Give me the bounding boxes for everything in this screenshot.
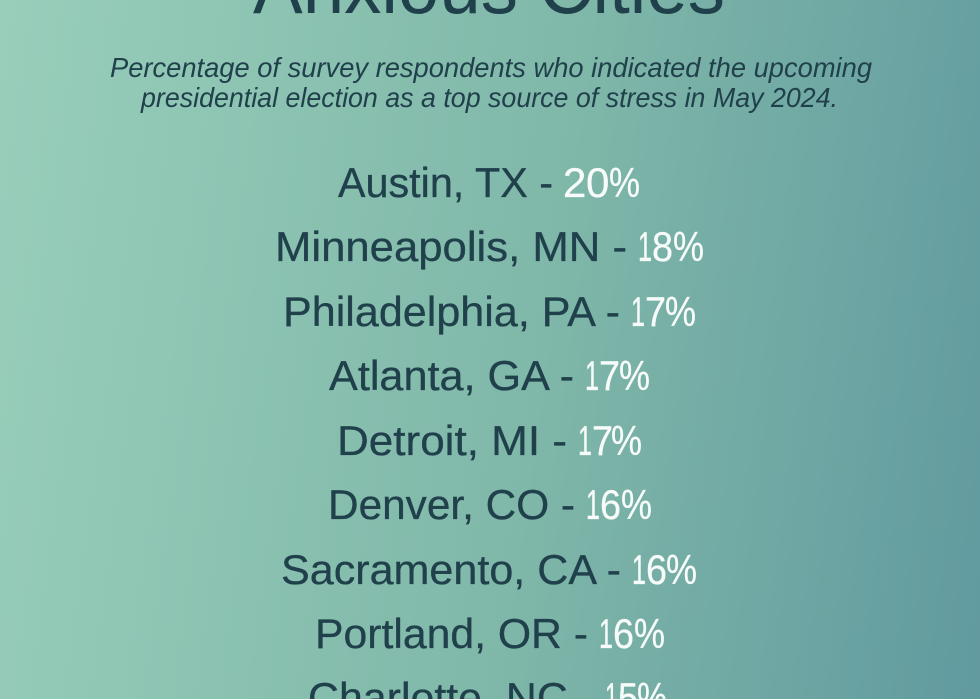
row: Philadelphia: % xyxy=(665,288,696,335)
row: Denver: Denver, CO - xyxy=(328,481,575,528)
row: Philadelphia: Philadelphia, PA - xyxy=(283,288,620,335)
row: Denver: % xyxy=(621,481,652,528)
row: Sacramento: 1 xyxy=(632,546,646,593)
row: Detroit: % xyxy=(611,417,642,464)
row: Atlanta: 1 xyxy=(585,352,599,399)
subtitle xyxy=(110,52,872,113)
row: Atlanta: Atlanta, GA - xyxy=(329,352,574,399)
row: Sacramento: 6 xyxy=(646,546,667,593)
row: Detroit: 7 xyxy=(592,417,613,464)
row: Portland: 6 xyxy=(613,610,634,657)
row: Austin: 20 xyxy=(563,159,609,206)
row: Portland: Portland, OR - xyxy=(315,610,588,657)
subtitle: presidential election as a top source of stress in May 2024. xyxy=(140,82,838,113)
row: Portland: 1 xyxy=(599,610,613,657)
row: Austin: % xyxy=(609,159,640,206)
row: Portland: % xyxy=(634,610,665,657)
row: Minneapolis: 8 xyxy=(652,223,673,270)
row: Atlanta: 7 xyxy=(599,352,620,399)
row: Sacramento: % xyxy=(666,546,697,593)
row: Sacramento: Sacramento, CA - xyxy=(281,546,621,593)
row: Denver: 1 xyxy=(586,481,600,528)
row: Detroit: Detroit, MI - xyxy=(337,417,567,464)
row: Detroit: 1 xyxy=(578,417,592,464)
ranked list of cities xyxy=(275,159,704,699)
row: Minneapolis: % xyxy=(673,223,704,270)
row: Minneapolis: Minneapolis, MN - xyxy=(275,223,627,270)
row: Austin: Austin, TX - xyxy=(338,159,553,206)
row: Atlanta: % xyxy=(619,352,650,399)
row: Denver: 6 xyxy=(600,481,621,528)
row: Philadelphia: 7 xyxy=(645,288,666,335)
subtitle: Percentage of survey respondents who indicated the upcoming xyxy=(110,52,872,83)
row: Philadelphia: 1 xyxy=(631,288,645,335)
row: Minneapolis: 1 xyxy=(638,223,652,270)
